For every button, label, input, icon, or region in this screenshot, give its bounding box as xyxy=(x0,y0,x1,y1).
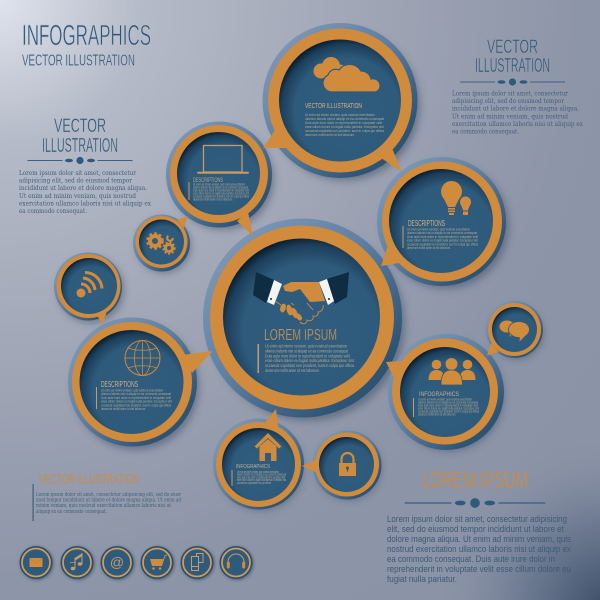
heading: descriptions: DESCRIPTIONS xyxy=(408,219,445,228)
circle: chat xyxy=(486,301,543,359)
text: globe description: ullamco laboris nisi ut aliquip ex ea commodo consequat xyxy=(101,392,171,396)
heading: infographics: INFOGRAPHICS xyxy=(236,464,270,470)
icon: globe xyxy=(125,340,160,376)
text: team description xyxy=(413,398,479,417)
text block: right vector illustration: Ut enim ad minim veniam, quis nostrud xyxy=(452,112,569,120)
circle: team xyxy=(386,334,504,451)
circle: wifi xyxy=(54,252,124,324)
text block: right vector illustration: Lorem ipsum dolor sit amet, consectetur xyxy=(452,90,569,98)
text: central description: deserunt mollit anim id est laborum. xyxy=(265,368,320,373)
icon: clouds xyxy=(314,57,380,92)
text: cloud description: Duis aute irure dolor in reprehenderit in voluptate velit xyxy=(305,121,382,125)
text block: lorem ipsum: elit, sed do eiusmod tempor incididunt ut labore et xyxy=(387,524,564,535)
text: cloud description: occaecat cupidatat non proident, sunt in culpa qui officia xyxy=(305,129,384,133)
text: globe description: esse cillum dolore eu fugiat nulla pariatur. Excepteur sint xyxy=(101,400,172,404)
text: bulb description: esse cillum dolore eu fugiat nulla pariatur. Excepteur sint xyxy=(407,239,478,243)
text block: right vector illustration: incididunt ut labore et dolore magna aliqua. xyxy=(452,105,579,113)
title: VECTOR ILLUSTRATION xyxy=(22,52,135,70)
icon: envelope xyxy=(20,546,54,580)
text: globe description: Ut enim ad minim veniam, quis nostrud exercitation xyxy=(101,388,163,392)
icon: handshake xyxy=(253,272,349,324)
text: bulb description xyxy=(402,226,478,250)
text block: left vector illustration: Lorem ipsum dolor sit amet, consectetur xyxy=(19,169,137,177)
text block: orange vector illustration xyxy=(32,471,181,521)
text: central description: Ut enim ad minim veniam, quis nostrud exercitation xyxy=(265,344,347,348)
text: laptop description: deserunt mollit anim id est laborum. xyxy=(193,198,233,202)
text block: right vector illustration: ea commodo consequat. xyxy=(452,128,519,136)
circle: gears xyxy=(133,214,191,273)
text block: left vector illustration xyxy=(19,116,151,215)
icon: lightbulbs xyxy=(441,181,471,215)
heading: descriptions: DESCRIPTIONS xyxy=(193,177,223,184)
circle: globe xyxy=(68,318,213,450)
text: team description: ullamco laboris nisi ut aliquip ex ea commodo consequat xyxy=(418,400,478,404)
icon: laptop xyxy=(198,146,248,174)
icon: people xyxy=(428,358,476,385)
text: laptop description: ullamco laboris nisi ut aliquip ex ea commodo consequat xyxy=(193,186,248,190)
text: central description: ullamco laboris nisi ut aliquip ex ea commodo consequat xyxy=(265,348,349,353)
text: team description: Duis aute irure dolor in reprehenderit in voluptate velit xyxy=(418,404,478,408)
heading: descriptions: DESCRIPTIONS xyxy=(101,380,138,389)
text block: right vector illustration: adipisicing elit, sed do eiusmod tempor xyxy=(452,97,565,105)
text block: lorem ipsum: ea commodo consequat. Duis aute irure dolor in xyxy=(387,554,555,565)
text block: orange vector illustration: mod tempor incididunt ut labore et dolore magna aliqua. Ut enim ad xyxy=(36,498,181,504)
text block: lorem ipsum: reprehenderit in voluptate velit esse cillum dolore eu xyxy=(387,564,571,575)
text: team description: occaecat cupidatat non proident, sunt in culpa qui officia xyxy=(418,410,479,414)
text block: left vector illustration: incididunt ut labore et dolore magna aliqua. xyxy=(19,184,147,192)
text block: lorem ipsum: LOREM IPSUM xyxy=(422,467,528,494)
text: team description: deserunt mollit anim id est laborum. xyxy=(418,412,456,416)
text: team description: esse cillum dolore eu fugiat nulla pariatur. Excepteur sint xyxy=(418,406,479,410)
circle: laptop xyxy=(166,122,274,236)
text: cloud description: esse cillum dolore eu fugiat nulla pariatur. Excepteur sint xyxy=(305,125,384,129)
icon: padlock xyxy=(339,453,356,476)
text: house description xyxy=(232,470,286,486)
text: bulb description: ullamco laboris nisi ut aliquip ex ea commodo consequat xyxy=(407,231,477,235)
text block: right vector illustration xyxy=(452,37,583,136)
text: house description: occaecat cupidatat non proident xyxy=(237,481,271,485)
text block: lorem ipsum: nostrud exercitation ullamco laboris nisi ut aliquip ex xyxy=(387,544,571,555)
text: bulb description: Duis aute irure dolor in reprehenderit in voluptate velit xyxy=(407,235,478,239)
text: bulb description: deserunt mollit anim id est laborum. xyxy=(407,246,451,250)
text: laptop description: esse cillum dolore eu fugiat nulla pariatur. Excepteur sint xyxy=(193,192,249,196)
text: laptop description xyxy=(188,182,249,202)
text: laptop description: Ut enim ad minim veniam, quis nostrud exercitation xyxy=(193,182,245,186)
icon: gears xyxy=(148,234,175,254)
text block: left vector illustration: ILLUSTRATION xyxy=(42,135,118,157)
icon: at sign xyxy=(100,546,134,580)
circle: cloud xyxy=(262,23,420,181)
text block: orange vector illustration: aliquip ex ea commodo consequat. xyxy=(36,509,107,515)
text: cloud description: ullamco laboris nisi ut aliquip ex ea commodo consequat xyxy=(305,117,384,121)
circle: lightbulbs xyxy=(377,157,509,289)
text: bulb description: Ut enim ad minim veniam, quis nostrud exercitation xyxy=(407,228,470,232)
heading: vector illustration: VECTOR ILLUSTRATION xyxy=(305,101,362,110)
text block: left vector illustration: exercitation ullamco laboris nisi ut aliquip ex xyxy=(19,199,151,207)
text: team description: Ut enim ad minim veniam, quis nostrud exercitation xyxy=(418,398,472,402)
icon: speech bubbles xyxy=(500,320,530,342)
text block: lorem ipsum: Lorem ipsum dolor sit amet, consectetur adipisicing xyxy=(387,514,567,525)
text: cloud description xyxy=(305,113,384,137)
icon: cart xyxy=(140,546,174,580)
text: globe description: Duis aute irure dolor in reprehenderit in voluptate velit xyxy=(101,396,171,400)
text block: left vector illustration: Ut enim ad minim veniam, quis nostrud xyxy=(19,192,137,200)
icon: music xyxy=(60,546,94,580)
text: central description: Duis aute irure dolor in reprehenderit in voluptate velit xyxy=(265,353,351,358)
text block: lorem ipsum xyxy=(387,467,571,585)
icon: wifi xyxy=(76,272,102,298)
text: laptop description: Duis aute irure dolor in reprehenderit in voluptate velit xyxy=(193,188,249,192)
text: central description: esse cillum dolore eu fugiat nulla pariatur. Excepteur sint xyxy=(265,358,355,363)
title: INFOGRAPHICS xyxy=(22,20,151,52)
text block: right vector illustration: VECTOR xyxy=(487,37,538,58)
text: house description: Duis aute irure dolor in reprehenderit in voluptate velit xyxy=(237,475,285,479)
icon: house xyxy=(254,433,282,461)
text: house description: esse cillum dolore eu fugiat nulla pariatur. Excepteur sint xyxy=(237,478,286,482)
heading: infographics: INFOGRAPHICS xyxy=(419,392,459,398)
text: cloud description: Ut enim ad minim veniam, quis nostrud exercitation xyxy=(305,113,375,117)
text block: orange vector illustration: Lorem ipsum dolor sit amet, consectetur adipisicing elit, sed do eiusr xyxy=(36,492,181,498)
text block: orange vector illustration: minim veniam, quis nostrud exercitation ullamco laboris nisi ut xyxy=(36,503,172,509)
text block: left vector illustration: ea commodo consequat. xyxy=(19,207,87,215)
text block: left vector illustration: VECTOR xyxy=(54,116,106,137)
text block: lorem ipsum: fugiat nulla pariatur. xyxy=(387,574,457,585)
text: cloud description: deserunt mollit anim id est laborum. xyxy=(305,133,355,137)
icon: devices xyxy=(180,546,214,580)
text: bulb description: occaecat cupidatat non proident, sunt in culpa qui officia xyxy=(407,242,478,246)
heading: lorem ipsum: LOREM IPSUM xyxy=(264,327,337,344)
text: house description: Ut enim ad minim veniam, quis nostrud exercitation xyxy=(237,470,279,474)
icon: headphones xyxy=(220,546,254,580)
circle: house xyxy=(213,409,304,510)
text block: left vector illustration: adipisicing elit, sed do eiusmod tempor xyxy=(19,177,133,185)
text: globe description: occaecat cupidatat non proident, sunt in culpa qui officia xyxy=(101,403,171,407)
circle: central handshake xyxy=(203,218,405,421)
text: central description xyxy=(258,344,355,373)
text block: orange vector illustration: VECTOR ILLUSTRATION xyxy=(39,471,139,488)
text: laptop description: occaecat cupidatat non proident, sunt in culpa qui officia xyxy=(193,194,249,198)
icon row xyxy=(20,546,254,580)
circle: padlock xyxy=(302,430,382,500)
title xyxy=(22,20,151,70)
text: globe description: deserunt mollit anim id est laborum. xyxy=(101,407,146,411)
icon: at sign: @ xyxy=(110,554,124,570)
text: house description: ullamco laboris nisi ut aliquip ex ea commodo consequat xyxy=(237,473,286,477)
text: globe description xyxy=(96,387,172,411)
text: central description: occaecat cupidatat non proident, sunt in culpa qui officia xyxy=(265,363,354,368)
